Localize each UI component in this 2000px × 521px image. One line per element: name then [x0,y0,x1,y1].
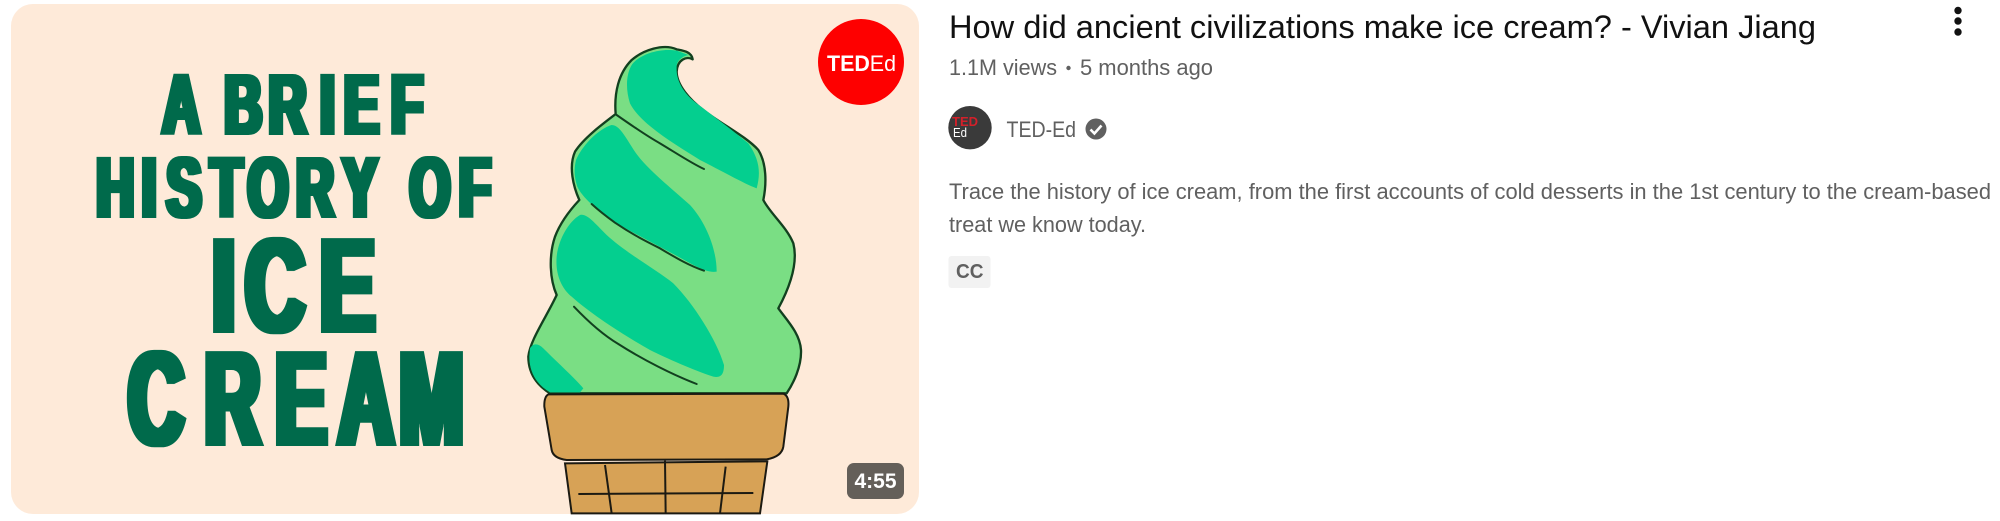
ice cream swirl base [528,47,801,393]
duration text: 4:55 [854,470,897,493]
heading line: HISTORY OF: HISTORY OF [97,141,491,235]
check disc [1086,118,1106,140]
upload date: 5 months ago [1080,55,1213,80]
swirl outlines [574,115,704,384]
icon: more options dots [1954,7,1962,36]
darker swirl bands [529,50,759,392]
illustration: ice cream cone [528,47,801,513]
logo: TED-Ed red circle [818,19,904,105]
description line 1: Trace the history of ice cream, from the first accounts of cold desserts in the 1st century to the cream-based [949,179,1991,204]
logo wordmark: TEDEd [827,51,896,76]
heading line: ICE: ICE [212,213,375,360]
badge background [948,256,990,288]
avatar Ed mark: Ed [953,125,967,140]
channel row [948,106,1106,149]
logo disc [818,19,904,105]
panel: video thumbnail [11,4,919,514]
video stats [949,55,1213,80]
icon: verified check [1086,118,1106,140]
thumbnail background [11,4,919,514]
duration badge [847,463,904,499]
closed captions badge [948,256,990,288]
channel avatar [948,106,992,149]
view count: 1.1M views [949,55,1057,80]
avatar TED mark: TED [952,114,978,129]
heading: a brief history of ice cream [97,58,491,472]
cone rim [544,394,788,460]
cone waffle lines [578,461,753,513]
badge label: CC [956,261,984,283]
video description [949,179,1991,237]
cone body [565,461,767,513]
heading line: A BRIEF: A BRIEF [162,58,423,152]
video title: How did ancient civilizations make ice cream? - Vivian Jiang [949,9,1816,45]
heading line: CREAM: CREAM [128,324,463,472]
separator dot [1066,66,1071,70]
description line 2: treat we know today. [949,212,1146,237]
channel name: TED-Ed [1006,117,1076,142]
heading block: ICE CREAM [128,213,463,472]
heading block: A BRIEF HISTORY OF [97,58,491,235]
check mark [1090,126,1102,134]
badge background [847,463,904,499]
avatar disc [948,106,992,149]
